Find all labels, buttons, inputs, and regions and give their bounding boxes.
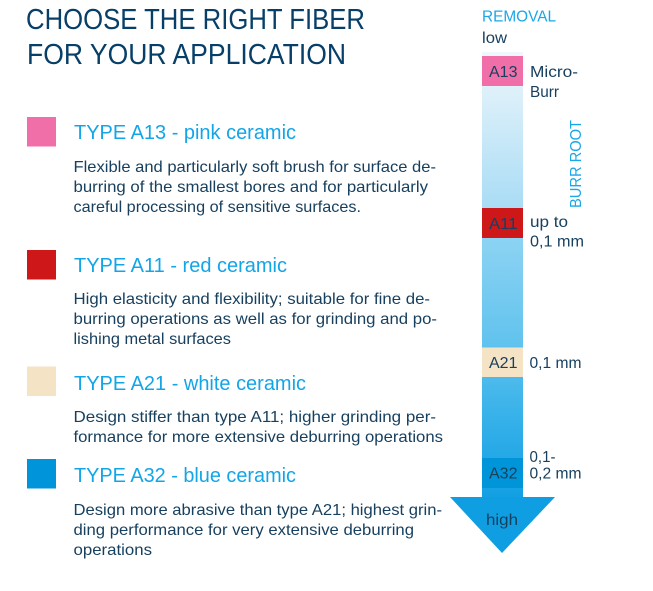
panel: type A13 xyxy=(27,117,436,216)
label: micro-burr xyxy=(530,64,578,101)
label: micro-burr: Burr xyxy=(530,84,559,101)
icon: cream swatch xyxy=(27,366,56,396)
arrow: removal gradient xyxy=(450,52,555,553)
panel: type A21 xyxy=(27,366,443,446)
marker: A32: A32 xyxy=(489,466,518,482)
text: A13 description: burring of the smallest bores and for particularly xyxy=(74,179,428,196)
text: A11 description: High elasticity and flexibility; suitable for fine de- xyxy=(74,291,430,308)
heading: type A21: TYPE A21 - white ceramic xyxy=(74,372,306,395)
marker: A21: A21 xyxy=(489,355,518,372)
text: A13 description xyxy=(74,159,436,216)
heading: type A11: TYPE A11 - red ceramic xyxy=(74,254,287,277)
title: FOR YOUR APPLICATION xyxy=(27,39,346,71)
label: 0,1-0,2 mm xyxy=(530,449,582,482)
label: burr root: BURR ROOT xyxy=(568,120,585,208)
chart: removal scale xyxy=(450,8,585,553)
text: A11 description: lishing metal surfaces xyxy=(74,331,231,348)
label: up to 0,1 mm xyxy=(530,214,584,250)
label: high: high xyxy=(486,512,518,529)
label: 0,1-0,2 mm: 0,2 mm xyxy=(530,466,582,482)
label: removal: REMOVAL xyxy=(482,8,556,26)
marker: A21 xyxy=(482,348,523,377)
text: A21 description: formance for more extensive deburring operations xyxy=(74,429,443,446)
text: A32 description xyxy=(74,502,442,559)
marker: A11 xyxy=(482,208,523,238)
panel: type A32 xyxy=(27,459,442,559)
text: A32 description: Design more abrasive than type A21; highest grin- xyxy=(74,502,442,519)
marker: A13: A13 xyxy=(489,64,518,81)
icon: pink swatch xyxy=(27,117,56,146)
text: A13 description: careful processing of sensitive surfaces. xyxy=(74,199,361,216)
label: 0,1-0,2 mm: 0,1- xyxy=(530,449,556,466)
label: up to 0,1 mm: up to xyxy=(530,214,568,231)
icon: blue swatch xyxy=(27,459,56,488)
panel: type A11 xyxy=(27,250,437,348)
label: micro-burr: Micro- xyxy=(530,64,578,81)
text: A11 description: burring operations as well as for grinding and po- xyxy=(74,311,437,328)
label: low: low xyxy=(482,30,508,47)
text: A21 description xyxy=(74,409,443,446)
label: 0,1 mm: 0,1 mm xyxy=(530,355,582,372)
text: A32 description: ding performance for very extensive deburring xyxy=(74,522,414,539)
text: A11 description xyxy=(74,291,437,348)
text: A32 description: operations xyxy=(74,542,152,559)
text: A21 description: Design stiffer than type A11; higher grinding per- xyxy=(74,409,436,426)
text: A13 description: Flexible and particularly soft brush for surface de- xyxy=(74,159,436,176)
icon: red swatch xyxy=(27,250,56,280)
heading: type A13: TYPE A13 - pink ceramic xyxy=(74,121,296,144)
marker: A32 xyxy=(482,458,523,488)
label: up to 0,1 mm: 0,1 mm xyxy=(530,234,584,250)
heading: type A32: TYPE A32 - blue ceramic xyxy=(74,464,296,487)
marker: A13 xyxy=(482,56,523,86)
title: CHOOSE THE RIGHT FIBER xyxy=(26,4,365,36)
marker: A11: A11 xyxy=(489,216,518,233)
title xyxy=(26,4,365,71)
